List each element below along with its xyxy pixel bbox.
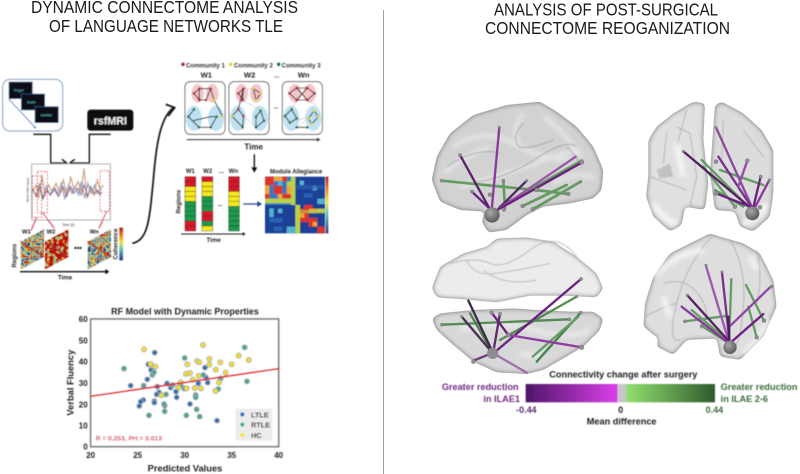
chart title: RF Model with Dynamic Properties bbox=[111, 307, 259, 317]
right label: in ILAE 2-6 bbox=[721, 394, 768, 404]
panel: task and rsfMRI pipeline bbox=[3, 79, 175, 282]
sliding window coherence matrices: W2 bbox=[47, 230, 56, 236]
left label: in ILAE1 bbox=[483, 394, 520, 404]
sliding window coherence matrices: ••• bbox=[74, 244, 82, 253]
region assignment bars: Wn bbox=[229, 169, 238, 175]
BOLD time series chart: BOLD fMRI signal bbox=[26, 178, 30, 202]
window headings: W2 bbox=[244, 71, 255, 80]
axis tick labels: 0 bbox=[83, 443, 88, 452]
time axis for networks bbox=[187, 138, 320, 151]
axis tick labels: 30 bbox=[180, 451, 190, 460]
scale values: -0.44 bbox=[516, 405, 537, 415]
axis tick labels: 50 bbox=[79, 336, 88, 345]
community legend: Community 1 bbox=[186, 62, 226, 69]
brain view: axial bbox=[432, 237, 603, 374]
scatter legend: HC bbox=[251, 431, 262, 440]
scale caption: Mean difference bbox=[587, 416, 657, 426]
task stimuli card bbox=[3, 79, 63, 131]
sliding window coherence matrices bbox=[12, 228, 123, 282]
sliding window coherence matrices: Wn bbox=[90, 230, 99, 236]
panel: community networks and module allegiance bbox=[176, 62, 328, 244]
brain view: oblique bbox=[643, 233, 777, 360]
statistics annotation: R = 0.253, Prt = 0.013 bbox=[96, 435, 162, 442]
module allegiance matrix: Module Allegiance bbox=[270, 169, 323, 175]
scatter legend: LTLE bbox=[251, 410, 269, 419]
community legend: Community 2 bbox=[234, 62, 274, 69]
left title: OF LANGUAGE NETWORKS TLE bbox=[49, 16, 283, 36]
color scale legend bbox=[442, 370, 798, 426]
axis tick labels: 40 bbox=[79, 358, 88, 367]
network window W1 bbox=[185, 82, 225, 134]
axis titles: Predicted Values bbox=[148, 463, 222, 473]
task stimuli card: knife bbox=[27, 99, 37, 104]
left label: Greater reduction bbox=[442, 382, 519, 392]
time axis for networks: Time bbox=[244, 142, 263, 151]
community legend bbox=[181, 62, 321, 69]
scatter legend: RTLE bbox=[251, 421, 270, 430]
gradient bar bbox=[526, 384, 715, 402]
HC points bbox=[141, 342, 251, 398]
rsfMRI label: rsfMRI bbox=[94, 116, 127, 128]
RTLE points bbox=[121, 345, 249, 419]
axis tick labels bbox=[79, 315, 284, 460]
sliding window coherence matrices: W1 bbox=[22, 230, 31, 236]
BOLD time series chart bbox=[26, 164, 110, 231]
scatter legend bbox=[235, 409, 272, 441]
right title: CONNECTOME REOGANIZATION bbox=[485, 18, 730, 38]
LTLE points bbox=[128, 350, 219, 423]
community legend: Community 3 bbox=[282, 62, 321, 69]
network window W2 bbox=[229, 82, 269, 134]
panel: community networks and module allegiance: ... bbox=[273, 105, 279, 111]
legend title: Connectivity change after surgery bbox=[549, 370, 698, 380]
plot frame bbox=[91, 319, 279, 447]
axis tick labels: 60 bbox=[79, 315, 88, 324]
axis tick labels: 20 bbox=[79, 400, 88, 409]
right title: ANALYSIS OF POST-SURGICAL bbox=[494, 0, 718, 20]
scale values: 0.44 bbox=[706, 405, 723, 415]
panel: brain connectome views bbox=[432, 102, 777, 374]
blue arrow to matrix bbox=[243, 201, 262, 207]
network window Wn bbox=[282, 82, 322, 134]
axis tick labels: 30 bbox=[79, 379, 88, 388]
left title bbox=[31, 0, 298, 36]
region assignment bars: Time bbox=[207, 237, 221, 244]
sliding window coherence matrices: Coherence bbox=[113, 228, 119, 259]
right title bbox=[485, 0, 730, 38]
window headings: ... bbox=[274, 74, 279, 80]
module allegiance matrix bbox=[265, 169, 328, 233]
window headings bbox=[201, 71, 310, 80]
downward arrow bbox=[251, 154, 257, 173]
region assignment bars: ... bbox=[217, 202, 223, 208]
axis tick labels: 10 bbox=[79, 421, 88, 430]
right label: Greater reduction bbox=[721, 382, 798, 392]
region assignment bars: ... bbox=[219, 169, 224, 175]
window headings: W1 bbox=[201, 71, 213, 80]
sliding window coherence matrices: Time bbox=[58, 275, 73, 282]
regression line bbox=[91, 369, 279, 396]
rsfMRI label bbox=[87, 110, 133, 131]
region assignment bars: W2 bbox=[203, 169, 213, 175]
scatter plot: RF model: Verbal Fluency bbox=[66, 349, 76, 416]
curved flow arrow bbox=[132, 104, 175, 243]
task stimuli card: ##### bbox=[41, 113, 53, 118]
scale values bbox=[516, 405, 723, 415]
region assignment bars: Regions bbox=[176, 189, 182, 213]
region assignment bars bbox=[176, 169, 246, 244]
brain view: anterior bbox=[646, 102, 773, 232]
region assignment bars: W1 bbox=[186, 169, 195, 175]
window headings: Wn bbox=[298, 71, 310, 80]
axis tick labels: 20 bbox=[86, 451, 96, 460]
scale values: 0 bbox=[618, 405, 623, 415]
axis tick labels: 35 bbox=[227, 451, 237, 460]
BOLD time series chart: Time (S) bbox=[62, 223, 75, 227]
brain view: lateral bbox=[432, 102, 603, 233]
axis tick labels: 40 bbox=[274, 451, 284, 460]
converging arrows bbox=[33, 134, 111, 166]
axis tick labels: 25 bbox=[133, 451, 143, 460]
sliding window coherence matrices: Regions bbox=[12, 243, 18, 267]
scatter plot: RF model bbox=[66, 307, 284, 473]
task stimuli card: finger bbox=[14, 88, 25, 93]
